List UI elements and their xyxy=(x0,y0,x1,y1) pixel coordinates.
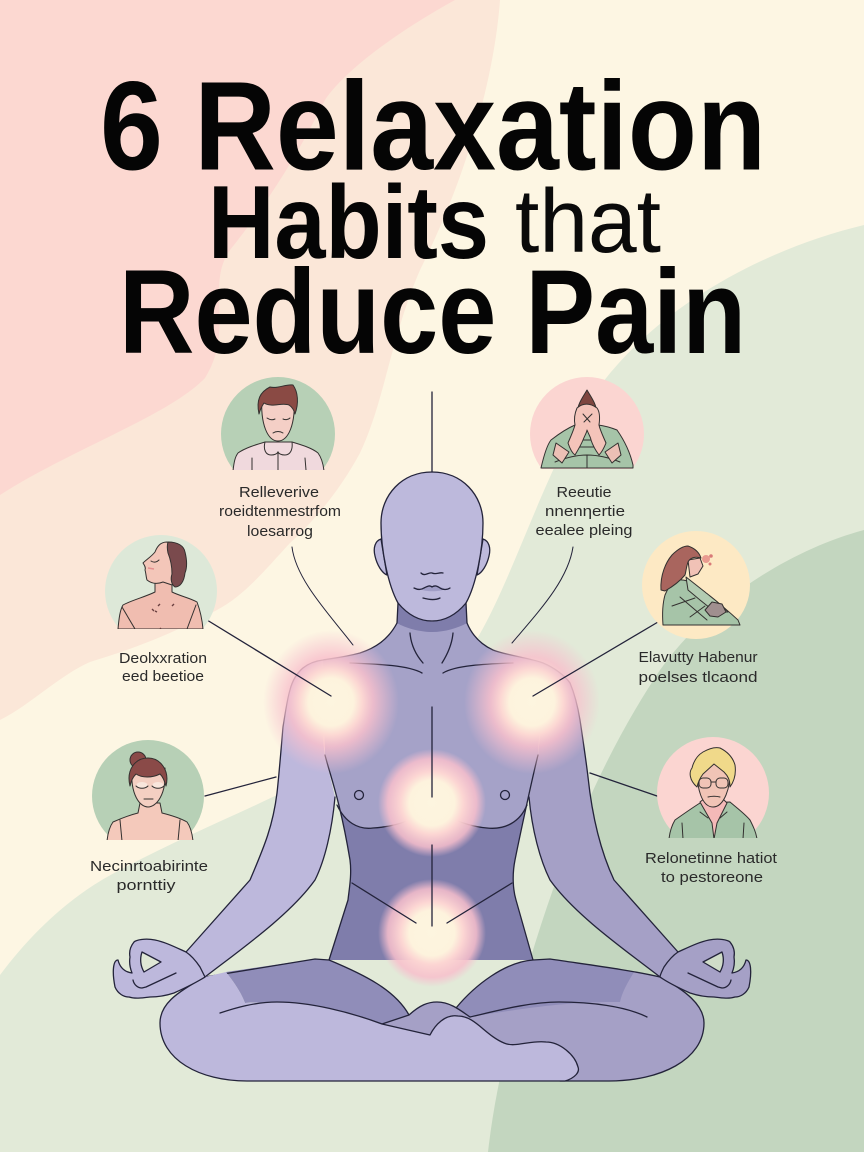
back leg xyxy=(400,959,704,1081)
title: Habits xyxy=(208,165,489,281)
icon: woman in profile xyxy=(105,535,217,629)
left hand xyxy=(113,939,205,998)
icon: woman with hair bun xyxy=(92,740,204,840)
abdomen shade xyxy=(329,805,533,960)
label: habit 2: eealee pleing xyxy=(536,522,632,539)
icon: person covering face xyxy=(530,377,644,469)
meditating figure xyxy=(113,472,751,1081)
body outlines xyxy=(186,623,397,952)
right hand xyxy=(660,939,751,998)
label: habit 1 xyxy=(219,484,341,540)
centre foot xyxy=(382,1002,470,1035)
label: habit 3: Deolxxration xyxy=(119,650,207,667)
label: habit 3 xyxy=(119,650,207,685)
left thigh xyxy=(226,959,409,1024)
label: habit 6 xyxy=(645,850,778,886)
label: habit 4: poelses tlcaond xyxy=(638,669,758,686)
head xyxy=(374,472,490,623)
pain glow: chest xyxy=(378,749,486,857)
icon: woman holding chest xyxy=(642,531,750,639)
label: habit 5 xyxy=(90,858,208,894)
left arm xyxy=(186,660,335,977)
label: habit 1: loesarrog xyxy=(247,523,313,540)
connector lines xyxy=(205,392,658,926)
label: habit 5: Necinrtoabirinte xyxy=(90,858,208,875)
label: habit 4 xyxy=(638,649,758,686)
icon: blond man with glasses xyxy=(657,737,769,849)
title: that xyxy=(515,172,661,272)
label: habit 2 xyxy=(536,484,632,539)
title: 6 Relaxation xyxy=(100,56,766,196)
pain glow: right shoulder xyxy=(464,630,600,774)
label: habit 6: Relonetinne hatiot xyxy=(645,850,778,867)
label: habit 4: Elavutty Habenur xyxy=(638,649,758,666)
right arm xyxy=(529,663,678,977)
icon: man with closed eyes xyxy=(221,377,335,470)
label: habit 5: pornttiy xyxy=(116,877,176,894)
label: habit 6: to pestoreone xyxy=(661,869,763,886)
label: habit 2: Reeutie xyxy=(556,484,612,501)
label: habit 1: roeidtenmestrfom xyxy=(219,503,341,520)
label: habit 1: Relleverive xyxy=(239,484,319,501)
neck shadow xyxy=(397,603,467,632)
label: habit 2: nnenηertie xyxy=(545,503,625,520)
label: habit 3: eed beetioe xyxy=(122,668,204,685)
title xyxy=(100,56,766,379)
pain glow: left shoulder xyxy=(263,630,399,774)
title: Reduce Pain xyxy=(119,245,746,379)
chest lines xyxy=(350,663,422,673)
torso xyxy=(323,600,543,960)
pain glow: abdomen xyxy=(378,879,486,987)
near leg xyxy=(160,972,578,1081)
